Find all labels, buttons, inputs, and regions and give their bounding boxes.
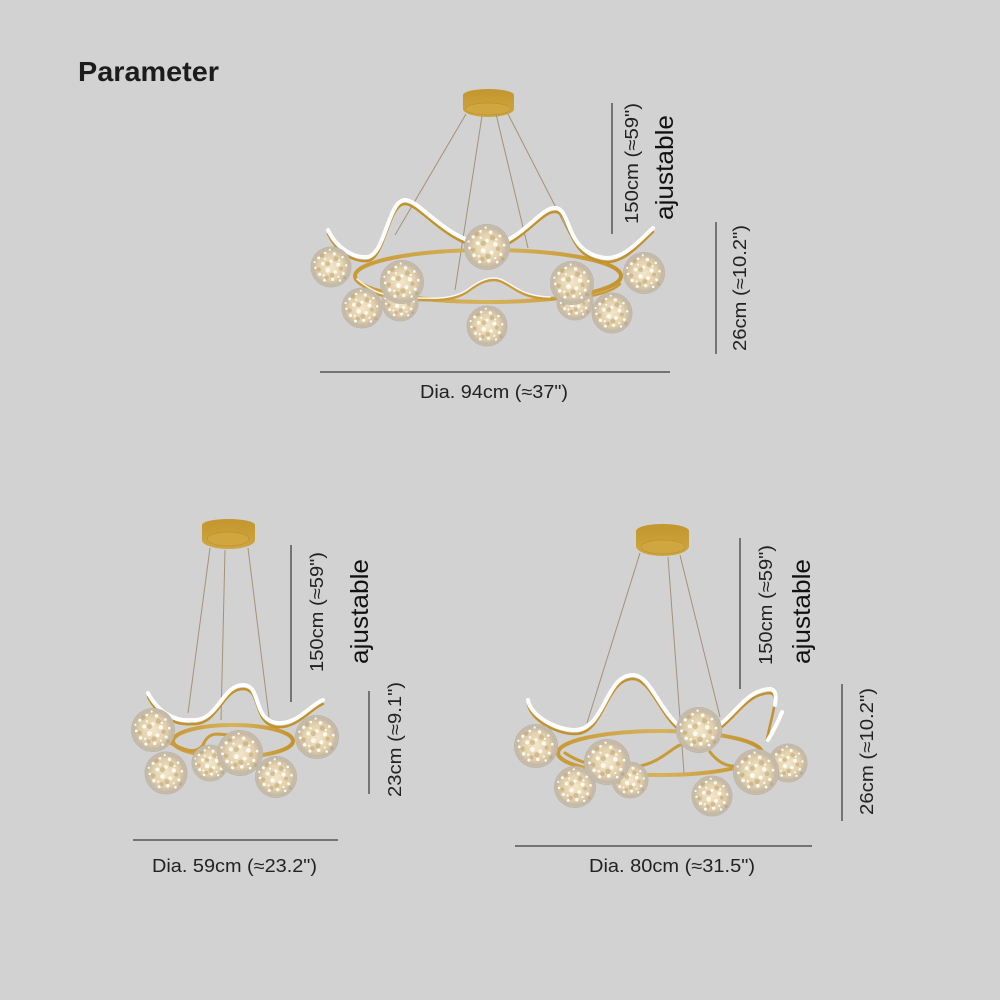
label: diameter 94cm: Dia. 94cm (≈37") [420, 382, 568, 402]
upper wave LED strip [148, 685, 323, 727]
ceiling canopy [463, 89, 514, 117]
glass globes [514, 707, 808, 816]
suspension wires [395, 114, 570, 290]
lower wave [565, 745, 745, 767]
glass globes [310, 224, 665, 346]
label: diameter 80cm: Dia. 80cm (≈31.5") [589, 856, 755, 876]
gold ring [355, 250, 621, 302]
upper wave LED strip [328, 200, 653, 262]
suspension wires [188, 548, 269, 720]
label: ajustable large: ajustable [651, 115, 679, 220]
gold ring [173, 725, 293, 757]
dimension lines: small [133, 545, 369, 840]
label: height 150cm small: 150cm (≈59") [307, 552, 327, 672]
label: body height 23cm: 23cm (≈9.1") [385, 682, 405, 797]
label: ajustable medium: ajustable [788, 559, 816, 664]
suspension wires [587, 553, 720, 773]
title: Parameter [78, 56, 219, 87]
label: body height 26cm medium: 26cm (≈10.2") [857, 688, 877, 815]
label: ajustable small: ajustable [346, 559, 374, 664]
lower wave [357, 278, 620, 300]
upper wave LED strip [528, 675, 782, 740]
label: body height 26cm large: 26cm (≈10.2") [730, 225, 750, 351]
chandelier: medium 80cm [514, 524, 808, 816]
glass globes [131, 708, 339, 798]
gold ring [558, 731, 762, 775]
ceiling canopy [202, 519, 255, 549]
chandelier: small 59cm [131, 519, 339, 798]
label: height 150cm medium: 150cm (≈59") [756, 545, 776, 665]
label: height 150cm large: 150cm (≈59") [622, 103, 642, 224]
label: diameter 59cm: Dia. 59cm (≈23.2") [152, 856, 317, 876]
dimension lines: large [320, 103, 716, 372]
chandelier: large 94cm [310, 89, 665, 346]
ceiling canopy [636, 524, 689, 556]
lower wave [170, 734, 228, 751]
dimension lines: medium [515, 538, 842, 846]
